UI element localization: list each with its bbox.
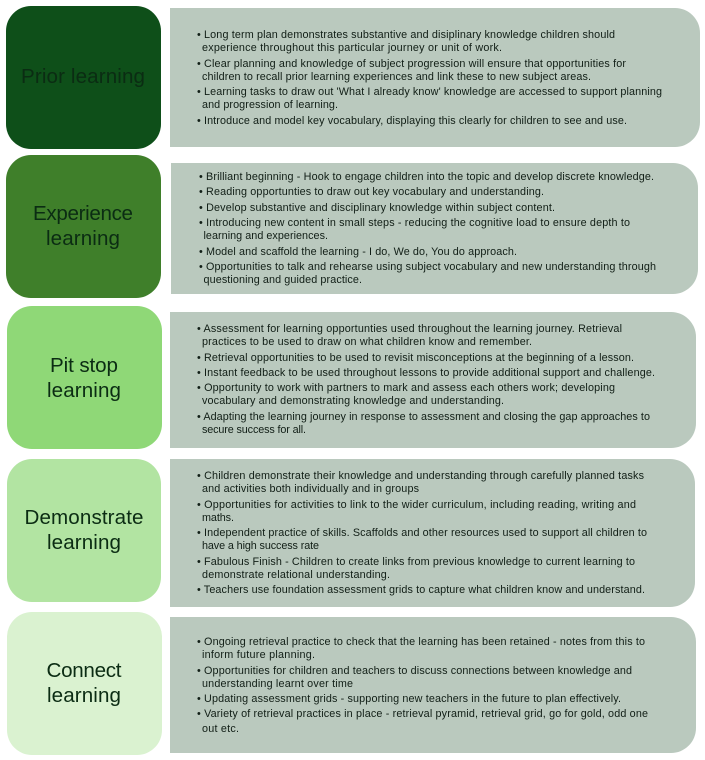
bullet: independent practice [197, 527, 647, 552]
bullet: demonstrate knowledge: and activities both individually and in groups [202, 483, 420, 495]
card: experience learning [6, 155, 161, 298]
card: experience learning: Experience [33, 202, 133, 225]
bullet: independent practice: • Independent practice of skills. Scaffolds and other resources used to support all children to [197, 527, 647, 539]
bullet: work with partners: • Opportunity to work with partners to mark and assess each others work; developing [197, 382, 615, 394]
bullet: fabulous finish: • Fabulous Finish - Children to create links from previous knowledge to current learning to [197, 556, 635, 568]
bullet: assessment for learning: practices to be used to draw on what children know and remember. [202, 336, 532, 348]
bullet: wider curriculum: maths. [202, 512, 234, 524]
bullet: retrieval opportunities: • Retrieval opportunities to be used to revisit misconceptions at the beginning of a lesson. [197, 352, 634, 364]
bullet: adapting the journey: • Adapting the learning journey in response to assessment and closing the gap approaches to [197, 411, 650, 423]
row: demonstrate learning [7, 459, 695, 607]
bullet: variety of practices: out etc. [202, 723, 239, 735]
bullet: variety of practices [197, 708, 648, 735]
bullet: reading opportunities: • Reading opportunties to draw out key vocabulary and understanding. [199, 186, 544, 198]
card: connect learning: Connect [46, 659, 122, 682]
bullet: independent practice: have a high success rate [202, 540, 319, 552]
bullet: new content: learning and experiences. [204, 230, 328, 242]
bullet: assessment for learning: • Assessment for learning opportunties used throughout the learning journey. Retrieval [197, 323, 622, 335]
panel: connect learning details [170, 617, 696, 753]
bullet: long term plan: experience throughout this particular journey or unit of work. [202, 42, 502, 54]
card: pit stop learning: Pit stop [50, 354, 118, 377]
bullet: assessment for learning [197, 323, 622, 348]
card: pit stop learning: learning [47, 379, 121, 402]
bullet: long term plan [197, 29, 615, 54]
card: experience learning: learning [46, 227, 120, 250]
bullet: work with partners: vocabulary and demonstrating knowledge and understanding. [202, 395, 504, 407]
card: prior learning [6, 6, 161, 149]
bullet: brilliant beginning: • Brilliant beginning - Hook to engage children into the topic and develop discrete knowledge. [199, 171, 654, 183]
bullet: demonstrate knowledge: • Children demonstrate their knowledge and understanding through carefully planned tasks [197, 470, 645, 482]
bullet: instant feedback: • Instant feedback to be used throughout lessons to provide additional support and challenge. [197, 367, 655, 379]
panel: demonstrate learning details [170, 459, 695, 607]
bullet: substantive knowledge: • Develop substantive and disciplinary knowledge within subject content. [199, 202, 555, 214]
bullet: variety of practices: • Variety of retrieval practices in place - retrieval pyramid, retrieval grid, go for gold, odd one [197, 708, 648, 720]
card: prior learning: Prior learning [21, 65, 145, 88]
bullet: assessment grids: • Teachers use foundation assessment grids to capture what children know and understand. [197, 584, 645, 596]
bullet: new content [199, 217, 630, 242]
panel: experience learning details [171, 163, 698, 294]
panel: prior learning details [170, 8, 700, 147]
row: experience learning [6, 155, 698, 298]
bullet: learning tasks [197, 86, 662, 111]
card: pit stop learning [7, 306, 162, 449]
card: connect learning: learning [47, 684, 121, 707]
bullet: discuss connections: • Opportunities for children and teachers to discuss connections between knowledge and [197, 665, 632, 677]
panel: pit stop learning details [170, 312, 696, 448]
bullet: updating grids: • Updating assessment grids - supporting new teachers in the future to plan effectively. [197, 693, 621, 705]
bullet: ongoing retrieval: • Ongoing retrieval practice to check that the learning has been retained - notes from this to [197, 636, 645, 648]
card: demonstrate learning: learning [47, 531, 121, 554]
bullet: fabulous finish: demonstrate relational understanding. [202, 569, 390, 581]
bullet: discuss connections: understanding learnt over time [202, 678, 353, 690]
bullet: learning tasks: and progression of learning. [202, 99, 338, 111]
bullet: demonstrate knowledge [197, 470, 645, 495]
bullet: talk and rehearse: questioning and guided practice. [204, 274, 362, 286]
card: demonstrate learning: Demonstrate [24, 506, 144, 529]
card: demonstrate learning [7, 459, 161, 602]
bullet: clear planning: children to recall prior learning experiences and link these to new subject areas. [202, 71, 591, 83]
bullet: key vocabulary: • Introduce and model key vocabulary, displaying this clearly for children to see and use. [197, 115, 627, 127]
bullet: adapting the journey: secure success for all. [202, 424, 306, 436]
bullet: clear planning [197, 58, 626, 83]
bullet: fabulous finish [197, 556, 635, 581]
bullet: talk and rehearse [199, 261, 656, 286]
bullet: adapting the journey [197, 411, 650, 436]
bullet: learning tasks: • Learning tasks to draw out 'What I already know' knowledge are accessed to support planning [197, 86, 662, 98]
bullet: clear planning: • Clear planning and knowledge of subject progression will ensure that opportunities for [197, 58, 626, 70]
bullet: ongoing retrieval: inform future planning. [202, 649, 315, 661]
bullet: discuss connections [197, 665, 632, 690]
bullet: long term plan: • Long term plan demonstrates substantive and disiplinary knowledge children should [197, 29, 615, 41]
bullet: talk and rehearse: • Opportunities to talk and rehearse using subject vocabulary and new understanding through [199, 261, 656, 273]
bullet: wider curriculum: • Opportunities for activities to link to the wider curriculum, including reading, writing and [197, 499, 636, 511]
bullet: ongoing retrieval [197, 636, 645, 661]
row: connect learning [7, 612, 696, 755]
bullet: wider curriculum [197, 499, 636, 524]
row: pit stop learning [7, 306, 696, 449]
bullet: model and scaffold: • Model and scaffold the learning - I do, We do, You do approach. [199, 246, 517, 258]
row: prior learning [6, 6, 700, 149]
card: connect learning [7, 612, 162, 755]
bullet: new content: • Introducing new content in small steps - reducing the cognitive load to ensure depth to [199, 217, 630, 229]
bullet: work with partners [197, 382, 615, 407]
